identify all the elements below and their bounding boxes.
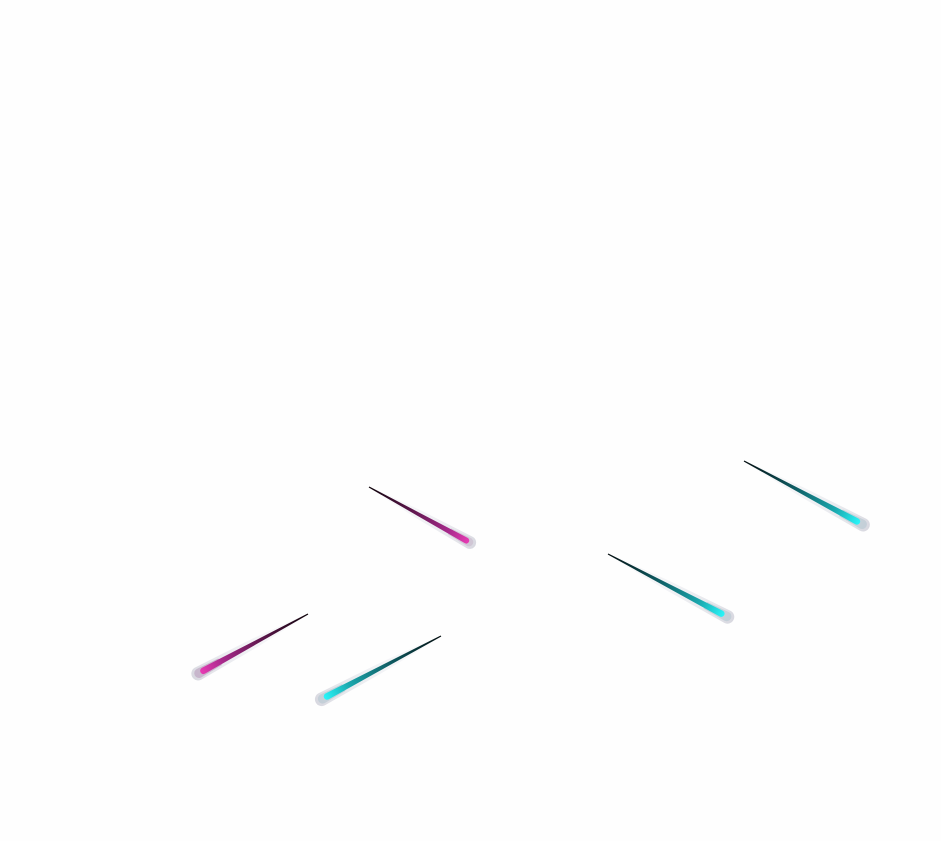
stroke: cyan, upper right xyxy=(741,455,872,534)
stroke: cyan, lower centre xyxy=(313,630,444,708)
stroke: cyan, centre right xyxy=(605,548,737,626)
stroke: magenta, lower left xyxy=(189,608,311,683)
stroke: magenta, upper centre xyxy=(366,481,478,551)
